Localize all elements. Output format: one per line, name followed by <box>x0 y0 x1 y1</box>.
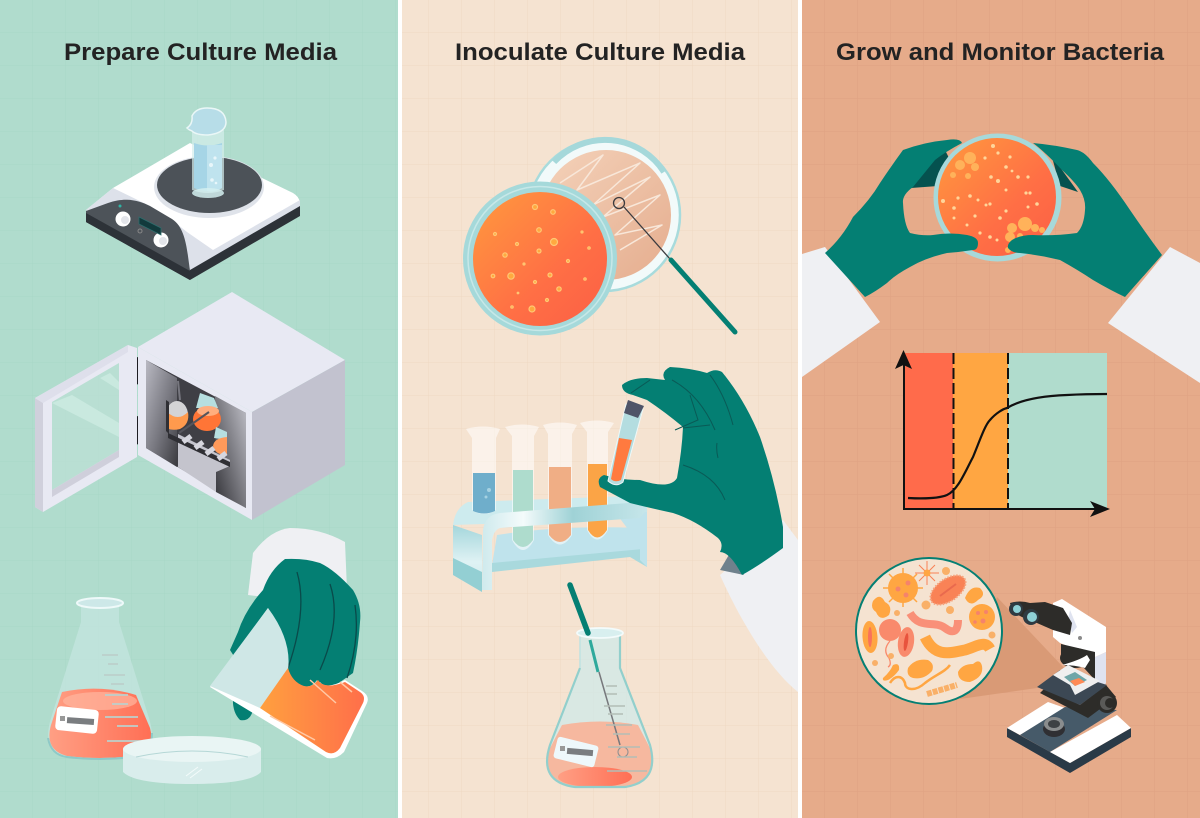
title: grow and monitor bacteria: Grow and Monitor Bacteria <box>836 39 1165 66</box>
test tube: green <box>505 424 539 550</box>
microscope stage and slide <box>1037 655 1117 718</box>
icon: left gloved hand <box>825 139 978 297</box>
microbes <box>861 561 996 694</box>
icon: flasks inside oven <box>166 381 227 455</box>
icon: streaked petri dish <box>527 138 681 292</box>
icon: sleeve of lab coat <box>720 520 798 692</box>
test tube: orange <box>580 420 614 540</box>
rack back and top surface <box>453 496 647 565</box>
flask label <box>553 736 599 768</box>
icon: magnetic stirrer with beaker <box>86 108 300 280</box>
title: inoculate culture media: Inoculate Culture Media <box>455 39 746 66</box>
icon: flask with submerged inoculation loop <box>547 585 652 787</box>
icon: microscope <box>1007 599 1131 773</box>
icon: dark inner glove shadows <box>911 150 1078 192</box>
flask label <box>55 706 99 734</box>
panel: grow and monitor bacteria <box>802 0 1200 818</box>
icon: culture plate held in hands <box>934 134 1062 262</box>
icon: right gloved hand <box>1008 143 1162 297</box>
icon: test tube rack with tubes <box>453 420 647 592</box>
microscope eyepieces <box>1009 602 1072 635</box>
icon: stirrer dials <box>116 204 168 248</box>
panel: inoculate culture media <box>402 0 798 818</box>
icon: orange petri dish with colonies <box>463 182 617 336</box>
chart: bacterial growth curve <box>895 350 1110 517</box>
test tube: blue <box>466 426 500 514</box>
icon: gloved hand holding test tube <box>599 367 783 575</box>
icon: beaker with water <box>187 108 226 198</box>
beaker <box>210 608 368 758</box>
title: prepare culture media: Prepare Culture Media <box>64 39 338 66</box>
icon: erlenmeyer flask with coral liquid <box>48 598 152 759</box>
icon: sleeve and gloved hand pouring beaker <box>210 528 368 758</box>
icon: right coat sleeve <box>1108 247 1200 383</box>
icon: left coat sleeve <box>802 247 880 377</box>
microscope arm and head <box>1053 599 1106 700</box>
icon: inoculation loop <box>614 198 735 332</box>
icon: open oven door <box>35 345 137 512</box>
test tube: peach <box>543 422 577 544</box>
icon: incubator oven <box>35 292 345 520</box>
chart axes <box>895 350 1110 517</box>
icon: magnified microbes circle <box>856 558 1002 704</box>
held test tube <box>608 400 644 485</box>
panel: prepare culture media <box>0 0 398 818</box>
icon: glass petri dish <box>123 736 261 784</box>
flask handle and loop <box>570 585 628 757</box>
icon: oven rack <box>166 400 230 467</box>
rack front rail and frame <box>453 502 647 592</box>
icon: microscope view beam <box>960 597 1064 699</box>
